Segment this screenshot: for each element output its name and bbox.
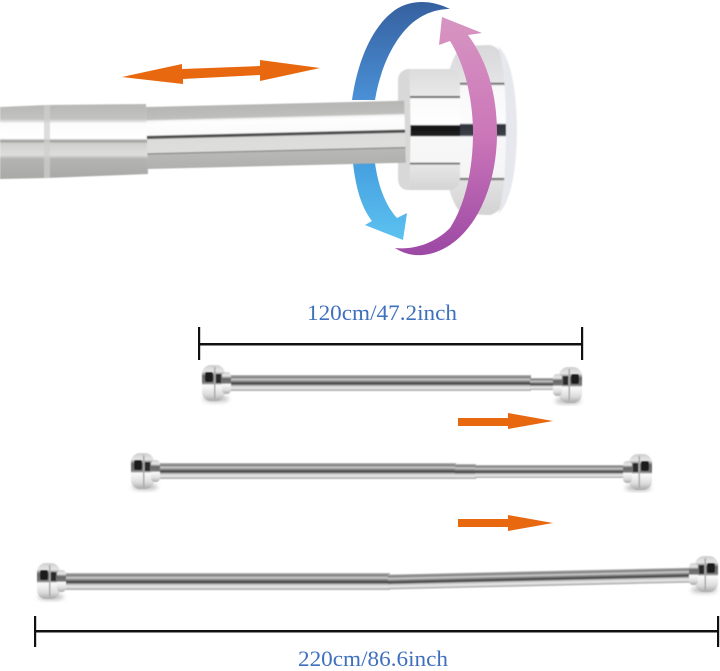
rod: shortest, 120cm bbox=[202, 365, 582, 404]
rod: longest, 220cm bbox=[37, 556, 718, 600]
large rod: telescopic close-up bbox=[145, 101, 406, 169]
double-headed orange arrow bbox=[122, 60, 320, 84]
inner rod section bbox=[145, 101, 406, 169]
end cap collar bbox=[398, 69, 460, 190]
orange arrow: extend 1 bbox=[458, 413, 553, 429]
orange arrow: extend 2 bbox=[458, 515, 553, 531]
label: 220cm/86.6inch: 220cm/86.6inch bbox=[298, 646, 448, 671]
dimension line: 120cm bbox=[198, 327, 583, 360]
rotation arrow: blue, lower arc with head bbox=[353, 163, 407, 240]
large rod: outer sleeve bbox=[0, 104, 148, 179]
rotation arrow: pink bbox=[395, 17, 497, 255]
label: 120cm/47.2inch: 120cm/47.2inch bbox=[307, 300, 457, 325]
rotation arrow: blue, upper arc bbox=[352, 2, 450, 100]
dimension line: 220cm bbox=[34, 616, 719, 647]
rod: medium bbox=[131, 453, 652, 491]
end cap flange bbox=[443, 45, 517, 215]
